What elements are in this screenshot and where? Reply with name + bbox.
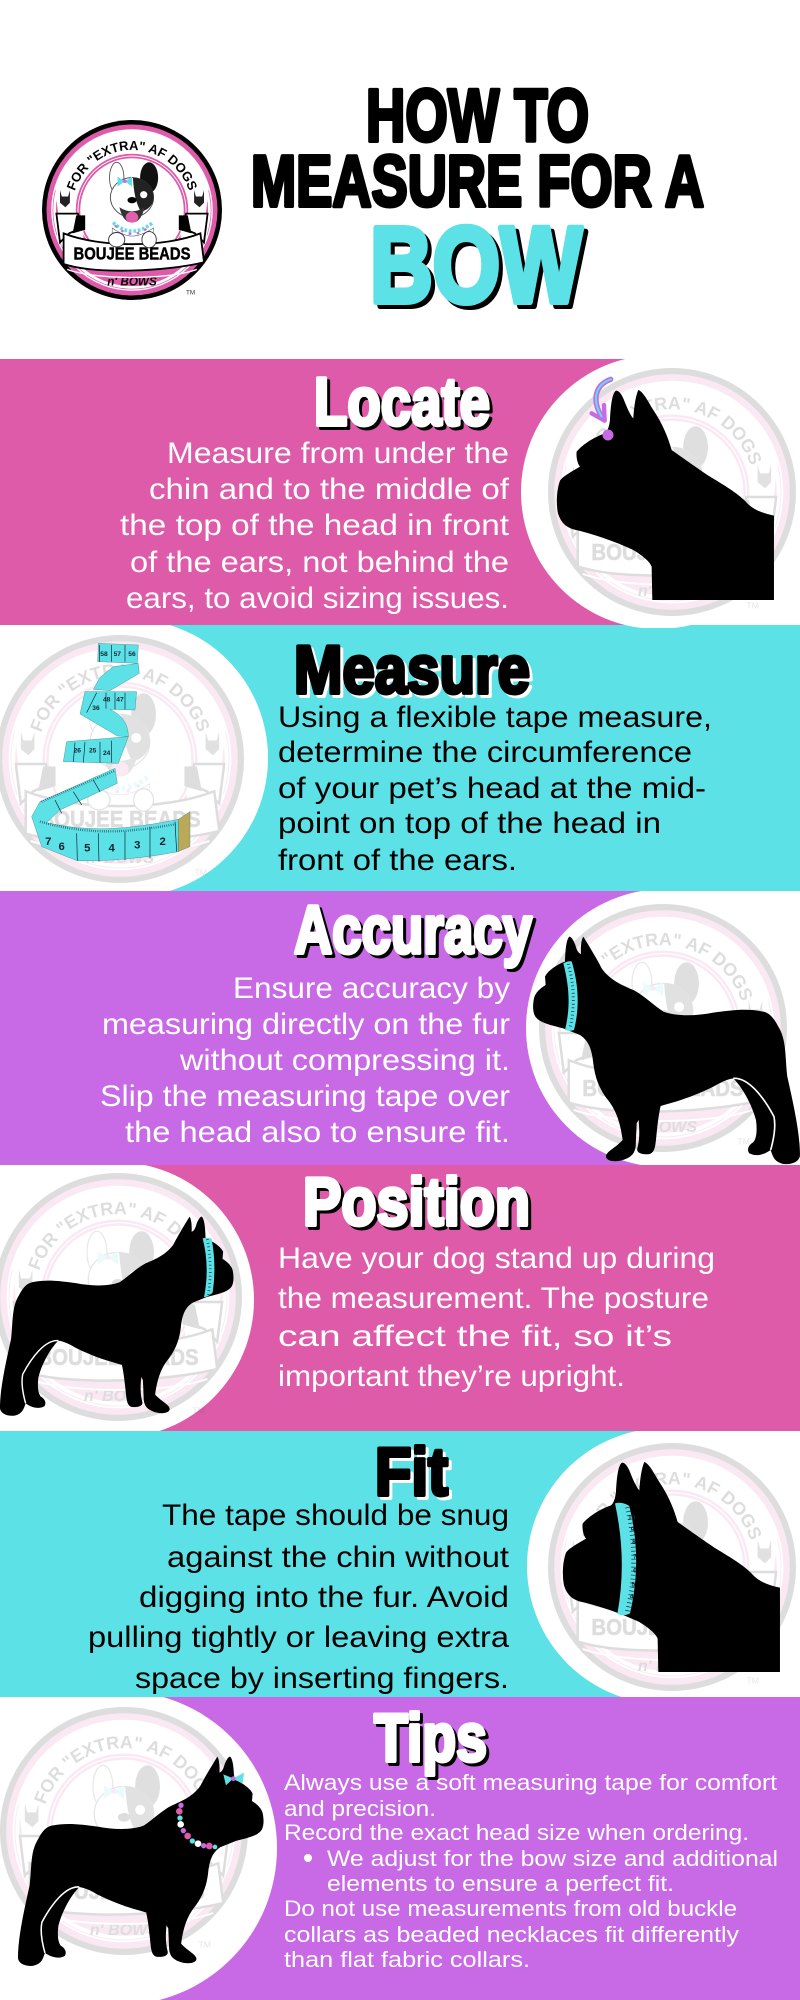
icon: measuring tape: 2 — [159, 836, 166, 848]
logo — [42, 120, 222, 300]
text: locate instructions: ears, to avoid sizing issues. — [126, 582, 509, 615]
panel: tips — [0, 1691, 778, 2000]
icon: measuring tape: 58 — [100, 651, 108, 658]
icon: measuring tape: 56 — [128, 651, 136, 658]
icon: measuring tape: 47 — [116, 697, 124, 704]
icon: measuring tape: 24 — [103, 750, 111, 757]
icon: measuring tape: 4 — [108, 843, 115, 855]
text: fit instructions: against the chin without — [167, 1541, 510, 1574]
icon: curved arrow to head — [592, 379, 611, 421]
logo: FOR "EXTRA" AF DOGS — [66, 141, 197, 190]
band: accuracy background — [0, 891, 800, 1165]
text: tips list — [284, 1770, 778, 1972]
title line: bow: BOW — [370, 204, 582, 325]
icon: tape around head: 6 — [633, 1568, 637, 1575]
logo: n' BOWS — [107, 276, 157, 289]
icon: beaded necklace — [176, 1803, 217, 1849]
text: position instructions: Have your dog stand up during — [278, 1242, 715, 1275]
icon: tape around neck — [203, 1238, 214, 1297]
band: fit background — [0, 1431, 800, 1697]
text: tips list: than flat fabric collars. — [284, 1947, 530, 1972]
heading: fit: Fit — [375, 1434, 448, 1510]
text: position instructions: important they’re upright. — [278, 1360, 625, 1393]
icon: measuring tape: 25 — [89, 748, 97, 755]
text: locate instructions: the top of the head in front — [120, 509, 510, 542]
icon: measuring tape — [32, 643, 190, 862]
panel: fit — [88, 1428, 800, 1704]
text: fit instructions: digging into the fur. Avoid — [139, 1581, 509, 1614]
icon: measuring tape: 48 — [103, 697, 111, 704]
text: measure instructions: point on top of the head in — [278, 807, 661, 840]
text: measure instructions: Using a flexible tape measure, — [278, 701, 712, 734]
heading: position: Position — [303, 1164, 530, 1240]
heading: accuracy: Accuracy — [294, 892, 532, 968]
silhouette: standing dog facing right — [0, 1217, 234, 1416]
panel: accuracy — [100, 889, 800, 1167]
icon: tape around head: 9 — [631, 1527, 635, 1534]
heading: locate: Locate — [314, 364, 490, 440]
text: accuracy instructions: without compressing it. — [179, 1044, 510, 1077]
icon: tape around head: 5 — [631, 1582, 635, 1589]
icon: tape around head: 7 — [633, 1553, 637, 1560]
icon: tape around neck — [563, 961, 578, 1031]
icon: tape around head: 8 — [632, 1539, 636, 1546]
title — [251, 74, 704, 325]
icon: measurement point — [602, 430, 614, 440]
icon: measuring tape: 26 — [74, 748, 81, 755]
text: position instructions: the measurement. The posture — [278, 1282, 709, 1315]
text: accuracy instructions — [100, 972, 510, 1149]
text: tips list: Do not use measurements from old buckle — [284, 1896, 737, 1921]
text: measure instructions: of your pet’s head at the mid- — [278, 772, 706, 805]
icon: tape around head: 4 — [630, 1593, 634, 1600]
heading: tips: Tips — [374, 1700, 487, 1776]
band: position background — [0, 1165, 800, 1431]
text: measure instructions: determine the circumference — [278, 736, 692, 769]
text: accuracy instructions: measuring directly on the fur — [102, 1008, 510, 1041]
icon: measuring tape: 7 — [45, 836, 51, 848]
icon: bow on ear — [223, 1773, 244, 1785]
text: tips list: Always use a soft measuring tape for comfort — [284, 1770, 777, 1795]
text: tips list: Record the exact head size when ordering. — [284, 1820, 749, 1845]
text: measure instructions — [278, 701, 712, 877]
text: accuracy instructions: Slip the measuring tape over — [100, 1080, 510, 1113]
text: locate instructions: Measure from under the — [167, 437, 509, 470]
text: measure instructions: front of the ears. — [278, 844, 517, 877]
silhouette: dog head — [557, 390, 774, 600]
text: tips list: collars as beaded necklaces fit differently — [284, 1922, 739, 1947]
icon: tape around head — [615, 1503, 637, 1615]
text: accuracy instructions: Ensure accuracy by — [233, 972, 510, 1005]
title line: how to: HOW TO — [366, 74, 589, 157]
logo: BOUJEE BEADS — [73, 245, 191, 264]
logo: TM — [186, 290, 195, 297]
icon: measuring tape: 57 — [114, 651, 121, 658]
band: locate background — [0, 359, 800, 625]
silhouette: standing dog — [533, 937, 800, 1164]
text: fit instructions: The tape should be snug — [162, 1499, 509, 1532]
silhouette: dog head — [563, 1462, 780, 1672]
text: fit instructions: space by inserting fingers. — [135, 1662, 509, 1695]
icon: measuring tape: 3 — [134, 839, 140, 851]
icon: measuring tape: 5 — [84, 843, 90, 855]
panel: position — [0, 1162, 715, 1438]
text: locate instructions — [120, 437, 510, 615]
band: measure background — [0, 625, 800, 891]
icon: measuring tape: 6 — [59, 841, 65, 853]
text: position instructions: can affect the fit, so it’s — [278, 1320, 672, 1353]
text: locate instructions: chin and to the middle of — [149, 473, 510, 506]
text: tips list: elements to ensure a perfect fit. — [327, 1871, 674, 1896]
icon: measuring tape: 36 — [92, 705, 100, 712]
text: tips list: We adjust for the bow size and additional — [327, 1846, 778, 1871]
text: accuracy instructions: the head also to ensure fit. — [125, 1116, 510, 1149]
panel: measure — [0, 619, 712, 897]
text: fit instructions: pulling tightly or leaving extra — [88, 1621, 509, 1654]
text: tips list: and precision. — [284, 1796, 436, 1821]
panel: locate — [120, 355, 800, 629]
band: tips background — [0, 1697, 800, 2000]
text: position instructions — [278, 1242, 715, 1393]
icon: tape around head: 10 — [628, 1514, 636, 1521]
silhouette: dog with necklace — [18, 1757, 264, 1966]
text: fit instructions — [88, 1499, 510, 1695]
text: locate instructions: of the ears, not behind the — [130, 546, 509, 579]
heading: measure: Measure — [294, 632, 530, 708]
